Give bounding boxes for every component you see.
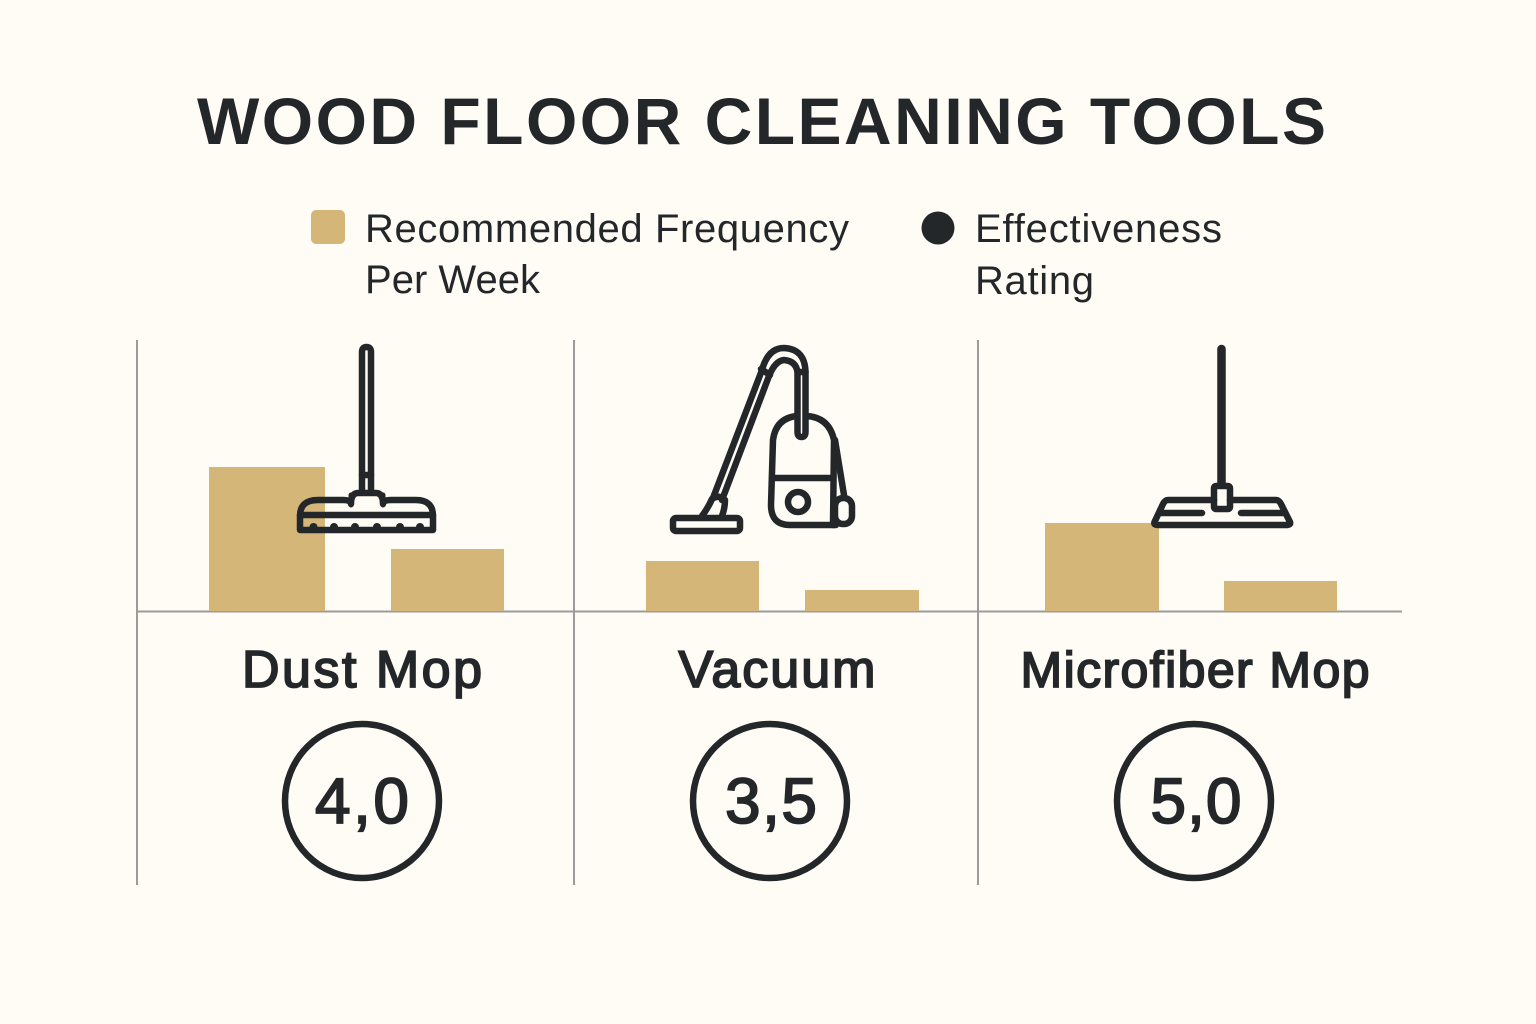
icon: vacuum	[673, 348, 852, 531]
label: vacuum: Vacuum	[678, 641, 876, 699]
icon: microfiber mop	[1154, 349, 1290, 525]
legend label: effectiveness: Effectiveness	[975, 207, 1222, 251]
bar: dust mop frequency	[209, 467, 325, 611]
label: dust mop: Dust Mop	[242, 641, 482, 699]
legend label: recommended frequency: Recommended Frequency	[365, 207, 849, 251]
panel: dust mop	[209, 347, 504, 878]
bar: dust mop second	[391, 549, 504, 611]
rating: dust mop	[285, 724, 439, 878]
legend label: recommended frequency: Per Week	[365, 258, 541, 302]
label: microfiber mop: Microfiber Mop	[1020, 642, 1370, 698]
rating: vacuum	[693, 724, 847, 878]
bar: vacuum frequency	[646, 561, 759, 611]
bar: microfiber mop second	[1224, 581, 1337, 611]
legend	[311, 207, 1222, 303]
panel: vacuum	[646, 348, 919, 878]
legend swatch: recommended frequency	[311, 210, 345, 244]
legend dot: effectiveness	[922, 212, 954, 244]
rating: microfiber mop	[1117, 724, 1271, 878]
rating: microfiber mop: 5,0	[1150, 765, 1242, 837]
bar: vacuum second	[805, 590, 919, 611]
icon: dust mop	[300, 347, 433, 531]
bar: microfiber mop frequency	[1045, 523, 1159, 611]
rating: dust mop: 4,0	[315, 765, 409, 837]
legend label: effectiveness: Rating	[975, 259, 1094, 303]
rating: vacuum: 3,5	[725, 765, 817, 837]
title: WOOD FLOOR CLEANING TOOLS	[197, 84, 1326, 158]
panel: microfiber mop	[1020, 349, 1370, 878]
chart grid lines	[137, 340, 1402, 885]
